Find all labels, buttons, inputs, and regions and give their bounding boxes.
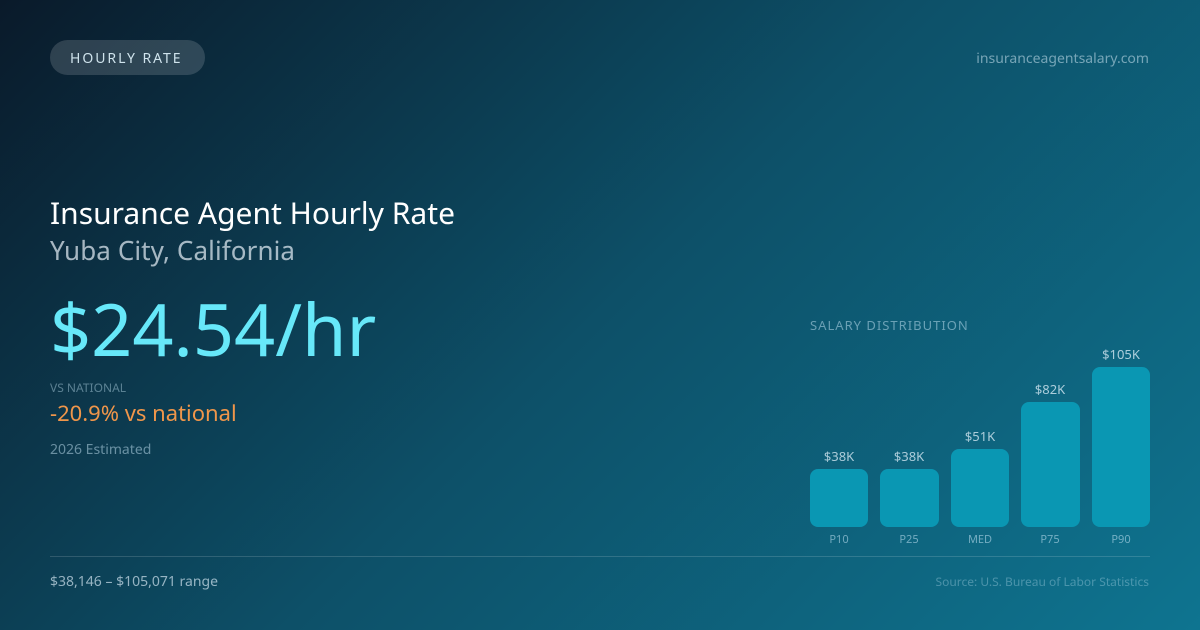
badge: hourly rate xyxy=(50,40,205,75)
bar: P75 xyxy=(1021,380,1080,547)
bar: P90: P90 xyxy=(1111,532,1131,547)
headline value: $24.54/hr xyxy=(50,280,376,378)
salary range: $38,146 – $105,071 range xyxy=(50,572,218,591)
bar: P25: $38K xyxy=(894,447,924,465)
title: Insurance Agent Hourly Rate xyxy=(50,192,455,233)
subtitle: location: Yuba City, California xyxy=(50,232,295,268)
site url: insuranceagentsalary.com xyxy=(976,49,1149,68)
bar: P75: P75 xyxy=(1040,532,1060,547)
bar: P10: P10 xyxy=(829,532,849,547)
bar: P75: $82K xyxy=(1035,380,1065,398)
comparison value: -20.9% vs national xyxy=(50,398,237,428)
bar: median: $51K xyxy=(965,427,995,445)
badge: hourly rate: HOURLY RATE xyxy=(70,49,183,68)
source note: Source: U.S. Bureau of Labor Statistics xyxy=(936,573,1149,590)
bar: P10: $38K xyxy=(824,447,854,465)
bar: median xyxy=(951,427,1009,547)
panel: salary distribution chart xyxy=(810,316,1150,547)
bar: P10 xyxy=(810,447,868,547)
estimate note: 2026 Estimated xyxy=(50,440,151,459)
bar: P90: $105K xyxy=(1102,345,1140,363)
bar: P25 xyxy=(880,447,939,547)
bar: P25: P25 xyxy=(899,532,919,547)
bar: median: MED xyxy=(968,532,992,547)
label: vs national: VS NATIONAL xyxy=(50,379,126,396)
chart heading: SALARY DISTRIBUTION xyxy=(810,316,969,334)
bar: P90 xyxy=(1092,345,1150,547)
